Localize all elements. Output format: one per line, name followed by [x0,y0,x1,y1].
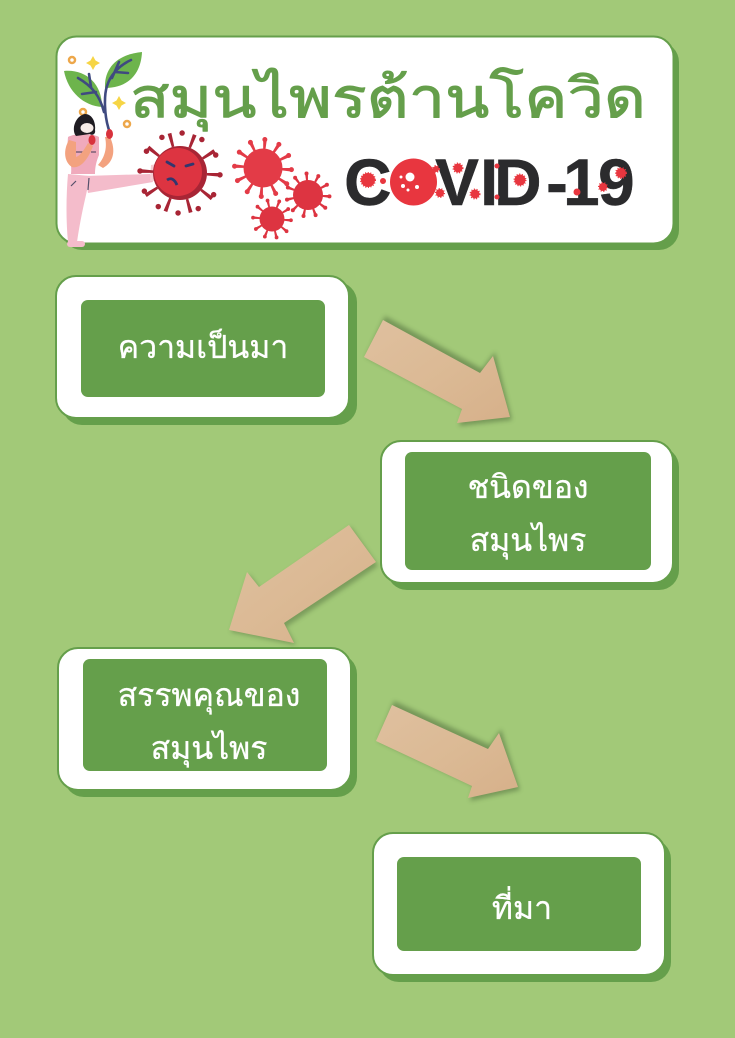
title: สมุนไพรต้านโควิด [130,67,646,132]
arrow: herb types to benefits [229,525,378,645]
icon: herb plant [64,52,142,130]
icon: virus large [234,140,292,196]
label [467,469,589,560]
label: สมุนไพร [470,522,586,560]
icon: virus small [253,200,291,238]
COVID-19 logo: C VID-19 [344,145,635,219]
panel: herb types section [381,441,679,590]
icon: angry virus [140,133,220,213]
label: ที่มา [492,886,552,926]
label: สมุนไพร [151,730,267,768]
label: ความเป็นมา [118,328,288,365]
arrow: benefits to sources [376,701,520,801]
panel: herb benefits section [58,648,357,797]
panel: background section [56,276,357,425]
icon: woman kicking virus [65,114,157,247]
icon: virus medium [286,174,330,216]
label: สรรพคุณของ [118,677,300,715]
panel: header banner [56,36,679,250]
label [118,677,300,768]
arrow: background to herb types [364,316,512,426]
panel: sources section [373,833,671,982]
label: ชนิดของ [467,469,589,505]
